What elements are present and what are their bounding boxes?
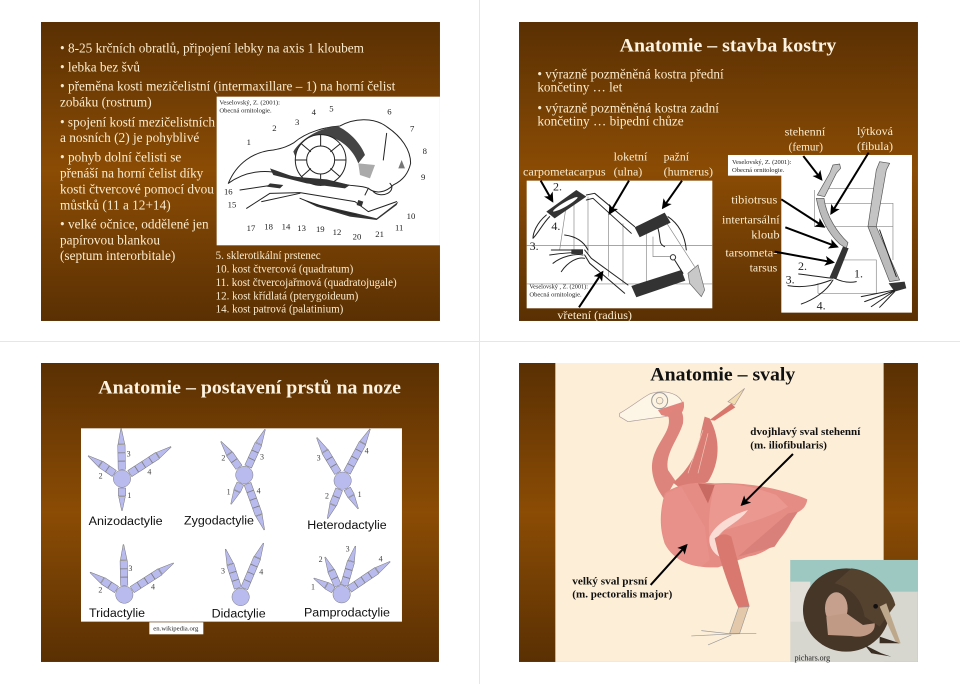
label: pectoralis: (m. pectoralis major) [572,589,673,601]
citation: Obecná ornitologie. [529,292,582,299]
diagram: Pamprodactylie: Pamprodactylie [304,605,390,619]
text block: skull bullets: • přeměna kosti mezičelistní (intermaxillare – 1) na horní čelist [60,79,395,95]
digit labels: 1. [854,266,863,280]
diagram: Didactylie: Didactylie [212,607,266,621]
heading: muscles: Anatomie – svaly [650,365,796,386]
diagram: Tridactylie [88,545,175,620]
diagram: Didactylie: 3 [221,566,225,575]
text block: skeleton bullets: končetiny … let [537,80,623,95]
text block: skull legend: 5. sklerotikální prstenec [216,249,321,262]
bone labels: carpometacarpus [523,165,606,178]
heading: skeleton: Anatomie – stavba kostry [620,36,837,57]
diagram: Didactylie: 4 [259,568,263,577]
source label: en.wikipedia.org [153,626,199,633]
diagram: Tridactylie: 4 [151,583,155,592]
diagram: Heterodactylie: 1 [358,490,362,499]
skull number labels: 21 [375,229,384,239]
diagram: Pamprodactylie: 2 [319,555,323,564]
diagram: Heterodactylie: 2 [325,492,329,501]
bone labels: stehenní [785,126,826,139]
skull number labels [224,104,427,241]
diagram: Anizodactylie: 4 [147,468,151,477]
digit labels: 2. [553,180,562,194]
diagram: Heterodactylie [307,427,387,532]
text block: skull legend: 12. kost křídlatá (pterygoideum) [216,289,358,302]
diagram: Tridactylie: Tridactylie [89,606,145,620]
text block: skeleton bullets [537,66,724,129]
heading: toes: Anatomie – postavení prstů na noze [98,377,401,398]
skull number labels: 17 [247,223,256,233]
text block: skull legend: 10. kost čtvercová (quadratum) [216,262,353,275]
text block: skull bullets: zobáku (rostrum) [60,94,152,110]
upper wing bones [533,190,686,250]
arrow: iliofibularis [742,454,793,505]
text block: skull bullets: • 8-25 krčních obratlů, připojení lebky na axis 1 kloubem [60,40,364,55]
skull number labels: 12 [333,227,341,237]
arrow: pectoralis [651,545,686,585]
diagram: Zygodactylie: Zygodactylie [184,513,254,527]
digit labels: 4. [817,298,826,312]
raised wing [673,388,745,492]
label: iliofibularis [750,426,861,451]
bone labels: tarsometa- [725,247,777,260]
left leg bones [788,164,856,304]
bone labels [523,125,894,322]
diagram: Pamprodactylie [304,545,392,619]
skull number labels: 2 [272,123,277,133]
diagram: Zygodactylie: 2 [221,454,225,463]
label: iliofibularis: (m. iliofibularis) [750,439,827,451]
skull number labels: 10 [407,211,415,221]
digit labels: 3. [786,272,795,286]
bone labels: (femur) [789,141,823,154]
bone labels: pažní [664,151,690,164]
bone labels: kloub [751,228,780,241]
text block: skull bullets: (septum interorbitale) [60,248,175,264]
photo: muscular kiwi: pichars.org [795,654,830,663]
skull outline [228,120,411,220]
bone labels: loketní [614,151,648,164]
digit labels: 2. [798,259,807,273]
diagram: Anizodactylie: 3 [127,450,131,459]
panel: skull anatomy [41,22,440,321]
skull number labels: 9 [421,172,425,182]
diagram: Zygodactylie: 1 [227,487,231,496]
text block: skull bullets: papírovou blankou [60,232,160,247]
toe diagrams figure [81,427,402,622]
digit labels [530,180,863,312]
skull number labels: 5 [329,104,334,114]
diagram: Pamprodactylie: 1 [311,582,315,591]
text block: skull bullets: můstků (11 a 12+14) [60,197,171,213]
source label [149,622,203,634]
label: pectoralis [572,575,673,601]
citation: Veselovský, Z. (2001): [732,159,791,166]
right leg bones [861,162,906,307]
diagram: Didactylie [212,542,267,621]
text block: skull bullets: přenáší na horní čelist díky [60,165,203,180]
diagram: Tridactylie: 2 [98,586,102,595]
skull number labels: 1 [247,137,251,147]
neck [652,409,683,499]
skull number labels: 7 [410,123,415,133]
bone labels: (ulna) [614,165,642,178]
text block: skeleton bullets: • výrazně pozměněná kostra zadní [537,100,719,115]
diagram: Zygodactylie: 3 [260,452,264,461]
text block: skull bullets: • lebka bez švů [60,60,140,75]
text block: skull legend: 11. kost čtvercojařmová (quadratojugale) [216,276,397,289]
bird head and beak [620,392,684,422]
skull number labels: 14 [282,221,291,231]
digit labels: 4. [551,219,560,233]
text block: skull bullets: a nosních (2) je pohyblivé [60,130,199,146]
diagram: Anizodactylie: 1 [127,491,131,500]
skull number labels: 8 [423,146,427,156]
label: pectoralis: velký sval prsní [572,575,648,587]
diagram: Anizodactylie: Anizodactylie [89,514,163,528]
text block: skeleton bullets: končetiny … bipední chůze [537,114,684,129]
label: iliofibularis: dvojhlavý sval stehenní [750,426,861,438]
photo: muscular kiwi [790,560,918,663]
text block: skull bullets: • velké očnice, oddělené jen [60,217,209,232]
skull number labels: 13 [297,223,306,233]
panel: toe arrangement [41,363,439,662]
skull figure [217,97,440,245]
skull number labels: 16 [224,186,233,196]
diagram: Pamprodactylie: 4 [379,554,383,563]
skull number labels: 4 [312,107,317,117]
bone labels: intertarsální [722,213,780,226]
skull number labels: 6 [387,106,392,116]
diagram: Anizodactylie: 2 [99,471,103,480]
diagram: Zygodactylie: 4 [257,487,261,496]
citation [219,100,280,115]
text block: skull bullets [60,40,395,264]
pectoral muscle [662,487,710,567]
diagram: Tridactylie: 3 [128,564,132,573]
bone labels: (humerus) [664,165,713,178]
muscle bird illustration [620,388,807,645]
bone labels: tarsus [750,262,778,275]
panel: skeleton [519,22,918,322]
skull number labels: 15 [228,199,236,209]
skull number labels: 20 [353,231,361,241]
diagram: Heterodactylie: 4 [365,446,369,455]
skull number labels: 3 [295,117,299,127]
diagram: Zygodactylie [184,428,268,531]
skull number labels: 19 [316,224,325,234]
citation: Veselovský , Z. (2001): [529,284,588,291]
citation: Obecná ornitologie. [219,108,272,115]
citation: Veselovský, Z. (2001): [219,100,280,107]
citation [529,284,588,299]
text block: skull legend: 14. kost patrová (palatinium) [216,303,343,316]
diagram: Pamprodactylie: 3 [346,545,350,554]
bone labels: vřetení (radius) [557,309,632,322]
citation: Obecná ornitologie. [732,167,785,174]
diagram: Heterodactylie: Heterodactylie [307,518,387,532]
panel: muscles [519,363,918,663]
digit labels: 3. [530,239,539,253]
thigh muscle [709,484,788,545]
skull number labels: 18 [264,221,273,231]
leg [691,534,756,645]
body [661,483,807,567]
wing skeleton figure [527,181,712,308]
skull number labels: 11 [395,223,403,233]
arrows: bone pointers [541,153,869,307]
bone labels: tibiotrsus [731,193,778,206]
citation [732,159,791,174]
lower wing bones [550,235,705,297]
text block: skull bullets: • spojení kostí mezičelistních [60,114,215,129]
text block: skeleton bullets: • výrazně pozměněná kostra přední [537,66,724,81]
text block: skull bullets: • pohyb dolní čelisti se [60,149,181,164]
leg skeleton figure [728,155,912,313]
diagram: Anizodactylie [86,429,173,528]
text block: skull bullets: kosti čtvercové pomocí dvou [60,181,214,196]
bone labels: (fibula) [857,140,893,153]
text block: skull legend [216,249,397,316]
diagram: Heterodactylie: 3 [317,454,321,463]
bone labels: lýtková [857,125,894,138]
